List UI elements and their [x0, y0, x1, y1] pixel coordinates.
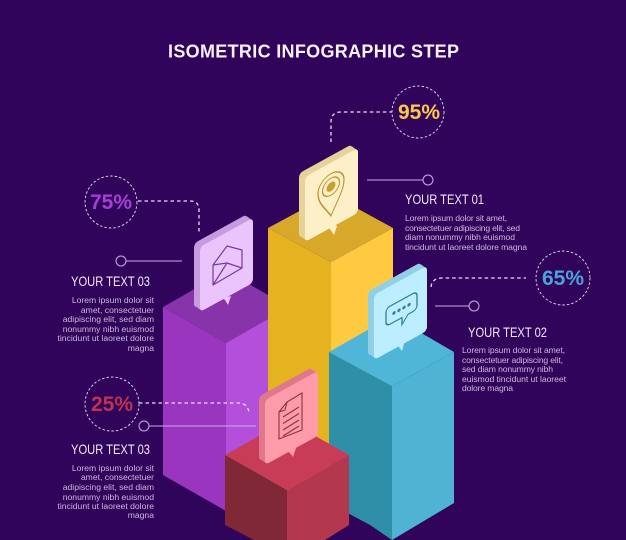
text block: your text 03 upper: Lorem ipsum dolor sit	[72, 295, 155, 305]
callout: 95%	[331, 86, 444, 142]
connector: text 02	[435, 301, 479, 311]
card: document	[259, 364, 318, 468]
card: envelope	[194, 211, 253, 315]
text block: your text 03 lower: tincidunt ut laoreet dolore	[57, 501, 154, 511]
connector: text 03 upper	[116, 256, 182, 266]
text block: your text 01: diam nonummy nibh euismod	[405, 232, 515, 242]
icon: document	[279, 393, 302, 439]
icon: chat bubble	[386, 291, 417, 333]
text block: your text 03 lower: YOUR TEXT 03	[71, 441, 150, 457]
connector: text 01	[367, 175, 433, 185]
text block: your text 01	[405, 191, 527, 252]
text block: your text 03 upper: adipiscing elit, sed diam	[63, 314, 154, 324]
text block: your text 02	[462, 324, 567, 393]
text block: your text 01: Lorem ipsum dolor sit amet,	[405, 213, 507, 223]
text block: your text 03 lower: amet, consectetuer	[81, 472, 154, 482]
callout: 25%	[85, 377, 249, 431]
callout: 75%	[85, 176, 199, 232]
text block: your text 01: tincidunt ut laoreet dolore magna	[405, 242, 527, 252]
text block: your text 01: consectetuer adipiscing elit, sed	[405, 223, 520, 233]
text block: your text 02: euismod tincidunt ut laoreet	[462, 374, 567, 384]
connector: text 03 lower	[139, 421, 256, 431]
text block: your text 03 lower: adipiscing elit, sed diam	[63, 482, 154, 492]
callout: 95%: 95%	[398, 101, 440, 124]
card: chat bubble	[368, 259, 427, 363]
text block: your text 03 lower: nonummy nibh euismod	[63, 492, 154, 502]
text block: your text 03 upper: amet, consectetuer	[81, 305, 154, 315]
text block: your text 03 lower	[57, 441, 155, 520]
red column	[225, 420, 349, 540]
icon: location pin	[318, 167, 344, 223]
callout: 65%: 65%	[542, 267, 584, 290]
callout: 65%	[431, 251, 590, 305]
yellow column	[268, 194, 393, 500]
text block: your text 02: dolore magna	[462, 383, 513, 393]
text block: your text 02: sed diam nonummy nibh	[462, 364, 553, 374]
text block: your text 01: YOUR TEXT 01	[405, 191, 484, 207]
text block: your text 03 upper: magna	[128, 343, 154, 353]
text block: your text 02: consectetuer adipiscing elit,	[462, 355, 563, 365]
title: ISOMETRIC INFOGRAPHIC STEP	[168, 42, 459, 62]
text block: your text 03 upper: nonummy nibh euismod	[63, 324, 154, 334]
text block: your text 03 lower: magna	[128, 510, 154, 520]
card: location pin	[299, 141, 358, 245]
text block: your text 02: Lorem ipsum dolor sit amet,	[462, 345, 565, 355]
blue column	[329, 316, 454, 540]
icon: envelope	[213, 246, 242, 285]
purple column	[163, 271, 289, 511]
text block: your text 03 upper	[57, 273, 155, 353]
text block: your text 03 upper: tincidunt ut laoreet dolore	[57, 333, 154, 343]
callout: 25%: 25%	[91, 393, 133, 416]
text block: your text 03 lower: Lorem ipsum dolor sit	[72, 463, 155, 473]
text block: your text 02: YOUR TEXT 02	[468, 324, 547, 340]
text block: your text 03 upper: YOUR TEXT 03	[71, 273, 150, 289]
callout: 75%: 75%	[90, 191, 132, 214]
